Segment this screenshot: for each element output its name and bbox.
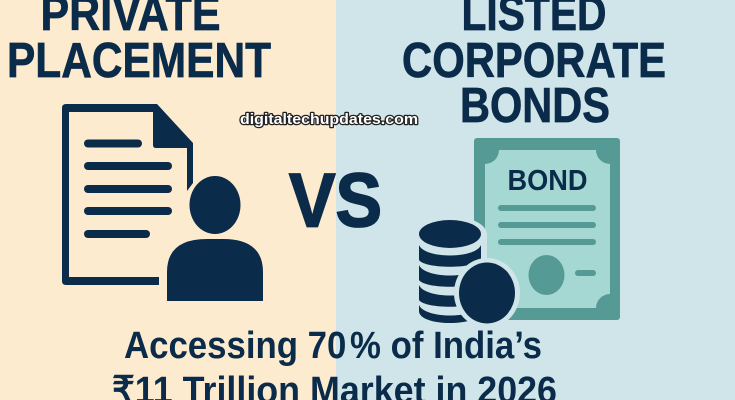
panel: private placement background bbox=[0, 0, 336, 400]
certificate paper bbox=[485, 150, 610, 308]
label: versus: VS bbox=[289, 158, 382, 244]
heading: listed corporate bonds: BONDS bbox=[460, 79, 610, 133]
icon: bond certificate bbox=[474, 138, 620, 320]
heading: private placement bbox=[7, 0, 271, 88]
stack halo bbox=[415, 217, 487, 324]
heading: listed corporate bonds bbox=[402, 0, 666, 133]
subtitle: Accessing 70% of India’s bbox=[124, 325, 542, 367]
heading: listed corporate bonds: CORPORATE bbox=[402, 34, 666, 88]
watermark: digitaltechupdates.com bbox=[240, 111, 418, 128]
panel: listed corporate bonds background bbox=[336, 0, 735, 400]
bond label: BOND bbox=[508, 165, 588, 197]
heading: private placement: PLACEMENT bbox=[7, 34, 271, 88]
person body bbox=[167, 239, 263, 301]
front coin bbox=[459, 262, 515, 324]
person head bbox=[190, 176, 240, 234]
certificate seal bbox=[528, 255, 564, 295]
front coin halo bbox=[454, 258, 520, 328]
document text lines bbox=[88, 144, 168, 234]
certificate lines bbox=[501, 208, 593, 273]
icon: document with person bbox=[62, 104, 263, 301]
subtitle bbox=[112, 325, 557, 400]
icon: coin stack bbox=[415, 217, 520, 328]
top coin bbox=[419, 220, 481, 248]
document outline bbox=[62, 104, 193, 285]
stack coins bbox=[419, 305, 481, 323]
certificate frame bbox=[474, 138, 620, 320]
